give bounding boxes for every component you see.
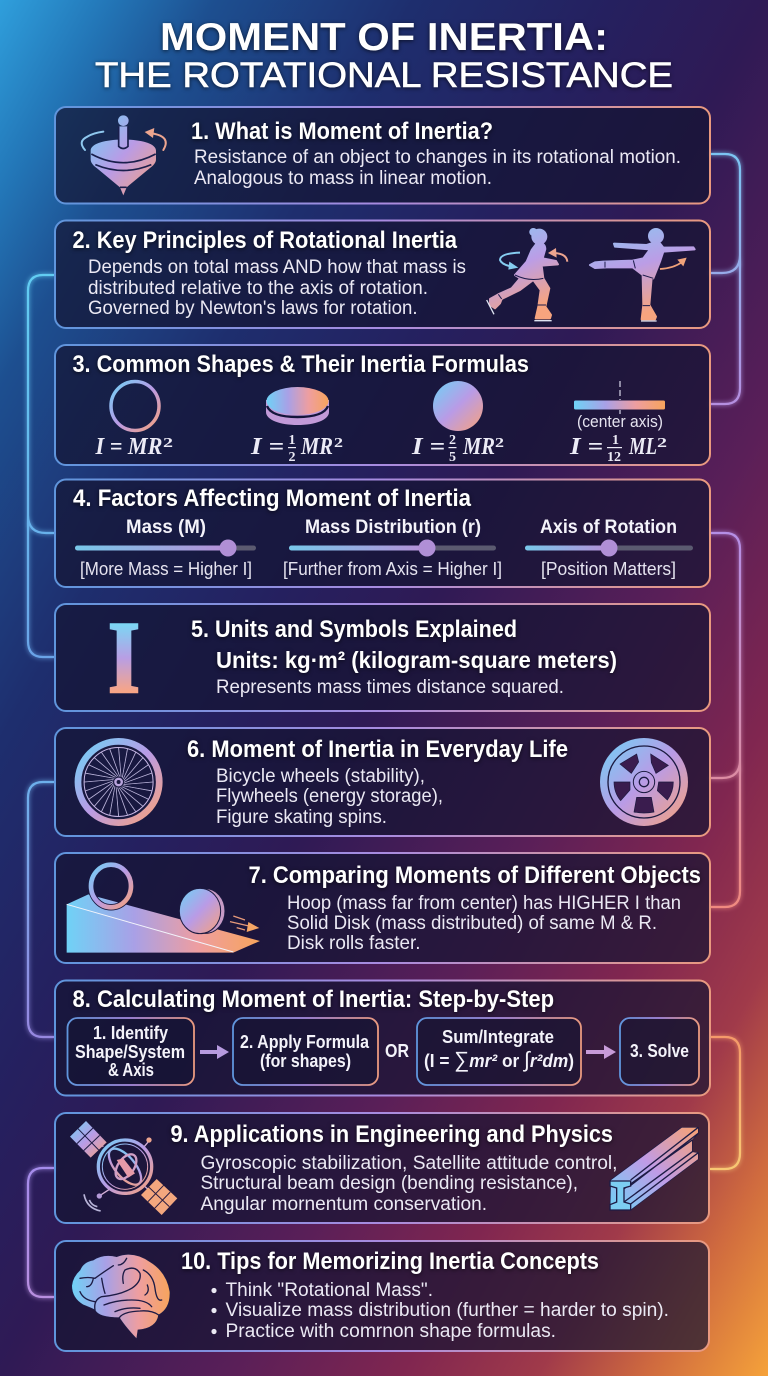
text: tips list	[211, 1279, 669, 1342]
text: tips list: Visualize mass distribution (further = harder to spin).	[226, 1299, 669, 1321]
title	[95, 16, 673, 95]
disk shape and formula: 2	[288, 450, 296, 465]
step 1 box: Shape/System	[75, 1042, 185, 1062]
text: definition	[194, 146, 681, 189]
heading 6: 6. Moment of Inertia in Everyday Life	[187, 736, 568, 763]
text: principles: Depends on total mass AND how that mass is	[88, 256, 466, 278]
disk shape and formula: I =	[250, 434, 284, 460]
panel 8: step-by-step calculation	[55, 980, 710, 1096]
panel 4: factors	[55, 480, 710, 587]
icon: skater with arms out	[590, 229, 695, 321]
panel 1: what is moment of inertia	[55, 107, 710, 204]
arrow: to step 3	[586, 1045, 616, 1059]
step 2 alternative box: Sum/Integrate	[442, 1027, 554, 1047]
rod shape and formula: ML	[628, 434, 657, 460]
text: everyday examples: Flywheels (energy storage),	[216, 785, 443, 807]
step 2 alternative box	[417, 1018, 581, 1085]
title: THE ROTATIONAL RESISTANCE	[95, 56, 673, 95]
factor: mass distribution: [Further from Axis = Higher I]	[283, 559, 502, 579]
icon: inertia symbol I: I	[108, 601, 140, 715]
icon: spinning top	[82, 115, 166, 195]
heading 7: 7. Comparing Moments of Different Objects	[248, 862, 701, 889]
rod shape and formula: 12	[607, 450, 621, 465]
hoop shape and formula: 2	[163, 436, 173, 451]
disk shape and formula: 2	[334, 436, 343, 451]
sphere shape and formula: 2	[495, 436, 504, 451]
factor: mass distribution	[283, 517, 502, 579]
sphere shape and formula: 2	[449, 433, 456, 448]
panel 10: tips	[55, 1241, 709, 1351]
heading 1: 1. What is Moment of Inertia?	[191, 118, 493, 145]
text: tips list: Think "Rotational Mass".	[226, 1279, 433, 1301]
illustration: hoop and disk on a ramp	[67, 865, 260, 953]
heading 3: 3. Common Shapes & Their Inertia Formulas	[72, 351, 529, 378]
factor: mass: [More Mass = Higher I]	[80, 559, 252, 579]
icon: bicycle wheel	[78, 742, 159, 822]
icon: I-beam	[610, 1127, 698, 1210]
step 2 box: (for shapes)	[260, 1051, 351, 1071]
disk shape and formula: 1	[288, 433, 296, 448]
text: everyday examples: Bicycle wheels (stability),	[216, 765, 425, 787]
label: or: OR	[385, 1041, 409, 1061]
heading 8: 8. Calculating Moment of Inertia: Step-by-Step	[72, 986, 554, 1013]
factor: mass: Mass (M)	[126, 517, 206, 538]
text: everyday examples: Figure skating spins.	[216, 806, 387, 828]
text: definition: Analogous to mass in linear motion.	[194, 167, 492, 189]
sphere shape and formula: MR	[462, 434, 495, 460]
factor: axis of rotation	[525, 517, 693, 579]
step 3 box	[620, 1018, 699, 1085]
panel 5: units and symbols	[55, 601, 710, 715]
hoop shape and formula: I = MR	[95, 434, 162, 460]
step 2 box	[233, 1018, 378, 1085]
step 1 box: & Axis	[108, 1060, 154, 1080]
factor: axis of rotation: Axis of Rotation	[540, 517, 677, 538]
factor: mass	[75, 517, 256, 579]
text: principles	[88, 256, 466, 319]
text: applications: Structural beam design (bending resistance),	[200, 1172, 578, 1194]
rod shape and formula: 2	[657, 436, 667, 451]
disk shape and formula: MR	[300, 434, 333, 460]
panel 7: comparing moments	[55, 853, 710, 963]
text: tips list: Practice with comrnon shape formulas.	[226, 1320, 556, 1342]
text: comparison: Disk rolls faster.	[287, 932, 420, 954]
rod shape and formula: 1	[612, 433, 619, 448]
step 2 alternative box: (I = ∑mr² or ∫r²dm)	[424, 1047, 574, 1072]
text: comparison: Hoop (mass far from center) has HIGHER I than	[287, 892, 681, 914]
rod shape and formula	[569, 381, 667, 465]
heading 2: 2. Key Principles of Rotational Inertia	[72, 227, 458, 254]
heading 9: 9. Applications in Engineering and Physics	[170, 1121, 613, 1148]
panel 9: applications	[55, 1113, 709, 1223]
arrow: step 1 to 2	[200, 1045, 229, 1059]
rod shape and formula: I =	[569, 434, 603, 460]
icon: satellite with gyroscope	[70, 1121, 177, 1215]
text: applications: Angular mornentum conservation.	[200, 1193, 487, 1215]
text: units meaning: Represents mass times distance squared.	[216, 676, 564, 698]
text: principles: distributed relative to the axis of rotation.	[88, 277, 428, 299]
text: principles: Governed by Newton's laws for rotation.	[88, 297, 418, 319]
title: MOMENT OF INERTIA:	[160, 16, 608, 59]
connectors between panels	[28, 154, 740, 1297]
text: applications	[200, 1152, 618, 1215]
factor: mass distribution: Mass Distribution (r)	[305, 517, 481, 538]
panel 3: common shapes	[55, 345, 710, 465]
heading 5: 5. Units and Symbols Explained	[191, 616, 517, 643]
sphere shape and formula: I =	[411, 434, 445, 460]
step 3 box: 3. Solve	[630, 1041, 689, 1061]
hoop shape and formula	[95, 382, 173, 460]
sphere shape and formula: 5	[449, 450, 456, 465]
heading 10: 10. Tips for Memorizing Inertia Concepts	[181, 1248, 599, 1275]
sphere shape and formula	[411, 381, 504, 465]
panel 2: key principles	[55, 220, 710, 328]
icon: flywheel	[600, 738, 688, 826]
step 1 box	[68, 1018, 194, 1085]
factor: axis of rotation: [Position Matters]	[541, 559, 676, 579]
disk shape and formula	[250, 387, 343, 465]
text: units: Units: kg·m² (kilogram-square meters)	[216, 647, 617, 673]
icon: brain	[72, 1254, 170, 1339]
text: definition: Resistance of an object to changes in its rotational motion.	[194, 146, 681, 168]
heading 4: 4. Factors Affecting Moment of Inertia	[73, 485, 472, 512]
step 2 box: 2. Apply Formula	[240, 1032, 370, 1052]
icon: skater with arms in	[487, 229, 567, 321]
step 1 box: 1. Identify	[93, 1023, 168, 1043]
text: comparison	[287, 892, 681, 954]
rod shape and formula: (center axis)	[577, 412, 663, 431]
text: comparison: Solid Disk (mass distributed) of same M & R.	[287, 912, 657, 934]
panel 6: everyday life	[55, 728, 710, 836]
text: everyday examples	[216, 765, 443, 828]
text: applications: Gyroscopic stabilization, Satellite attitude control,	[200, 1152, 618, 1174]
